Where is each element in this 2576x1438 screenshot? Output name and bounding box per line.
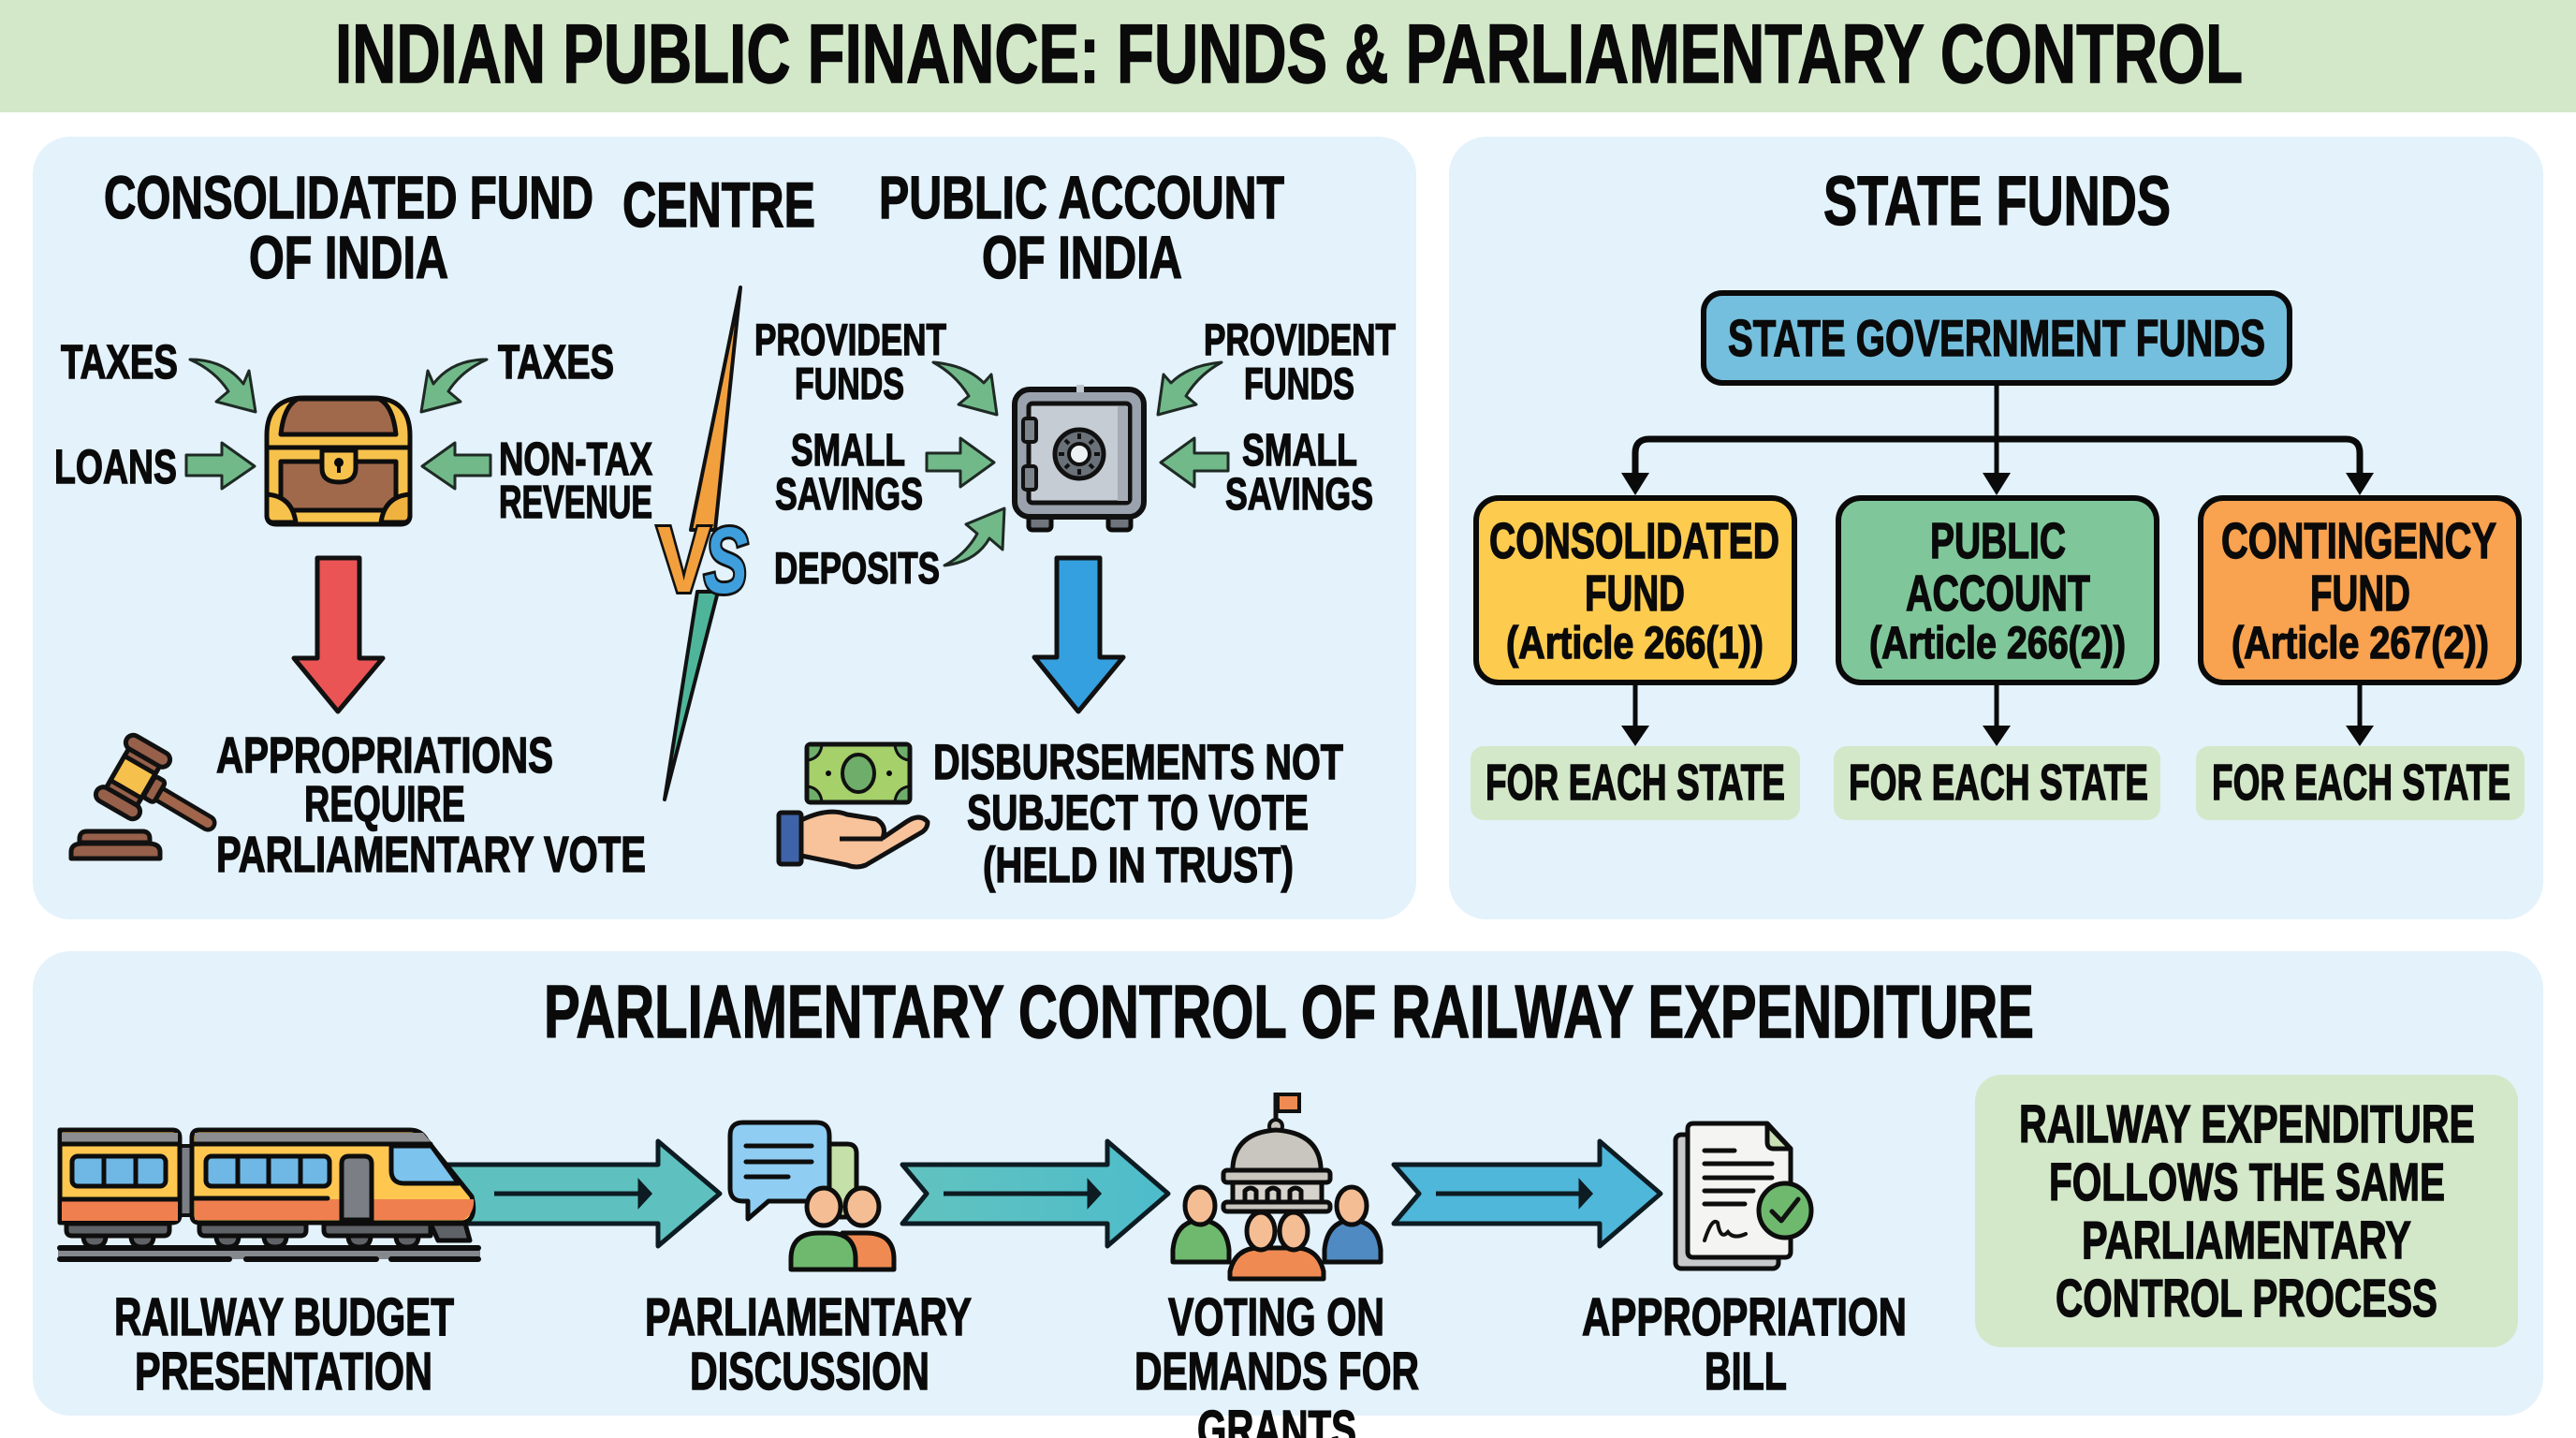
icon: gavel <box>71 732 208 858</box>
label: provident funds right: FUNDS <box>1244 359 1354 408</box>
arrow: discussion to voting <box>902 1141 1168 1246</box>
box: consolidated fund: FUND <box>1585 565 1685 622</box>
label: voting on demands for grants: VOTING ON <box>1168 1287 1384 1347</box>
heading: consolidated fund of india <box>104 164 593 291</box>
box: public account <box>1838 498 2157 682</box>
label: provident funds left: PROVIDENT <box>754 315 946 364</box>
heading: public account of india <box>879 164 1284 291</box>
arrow: small savings left into safe <box>927 438 994 487</box>
label: small savings right: SAVINGS <box>1225 470 1373 520</box>
tag: for each state 2: FOR EACH STATE <box>1849 755 2148 811</box>
heading: state funds: STATE FUNDS <box>1823 162 2171 240</box>
heading: public account of india: OF INDIA <box>982 224 1182 291</box>
label: appropriation bill <box>1582 1287 1907 1401</box>
label: appropriation bill: BILL <box>1705 1342 1787 1401</box>
heading: public account of india: PUBLIC ACCOUNT <box>879 164 1284 231</box>
panel: railway expenditure <box>33 951 2543 1438</box>
label: appropriation bill: APPROPRIATION <box>1582 1287 1907 1347</box>
label: railway budget presentation <box>114 1287 454 1401</box>
label: taxes left: TAXES <box>61 335 178 389</box>
label: small savings left <box>775 426 923 520</box>
label: provident funds right: PROVIDENT <box>1204 315 1396 364</box>
tag: for each state 1 <box>1471 746 1800 820</box>
label: railway budget presentation: RAILWAY BUDGET <box>114 1287 454 1347</box>
arrow: provident left into safe <box>933 362 997 415</box>
label: deposits: DEPOSITS <box>774 543 940 593</box>
box: public account: PUBLIC <box>1930 513 2066 569</box>
arrow: non-tax revenue into chest <box>422 443 490 489</box>
VS divider with lightning <box>657 287 748 800</box>
label: provident funds right <box>1204 315 1396 408</box>
heading: centre: CENTRE <box>622 169 815 241</box>
tag: for each state 2 <box>1834 746 2160 820</box>
arrow: taxes left into chest <box>190 360 256 412</box>
label: non-tax revenue: NON-TAX <box>499 434 652 485</box>
arrow: deposits into safe <box>944 508 1004 565</box>
text: disbursements not subject to vote: (HELD IN TRUST) <box>983 838 1294 893</box>
arrow: loans into chest <box>186 443 255 489</box>
text: disbursements not subject to vote: DISBURSEMENTS NOT <box>933 735 1343 790</box>
icon: parliament with voters <box>1173 1093 1381 1279</box>
label: small savings right <box>1225 426 1373 520</box>
label: provident funds left <box>754 315 946 408</box>
label: small savings left: SMALL <box>791 426 905 476</box>
arrows: down to for each state <box>1621 684 2374 746</box>
VS divider with lightning: S <box>704 508 748 613</box>
heading: parliamentary control of railway expenditure: PARLIAMENTARY CONTROL OF RAILWAY EXPENDITURE <box>544 970 2034 1053</box>
box: consolidated fund: (Article 266(1)) <box>1506 619 1764 668</box>
icon: parliamentary discussion <box>730 1123 894 1269</box>
label: railway budget presentation: PRESENTATION <box>135 1342 432 1401</box>
label: loans: LOANS <box>54 440 177 493</box>
box: contingency fund <box>2201 498 2519 682</box>
icon: safe <box>1015 385 1144 530</box>
arrow: voting to bill <box>1394 1141 1661 1246</box>
tag: for each state 1: FOR EACH STATE <box>1486 755 1785 811</box>
label: taxes right: TAXES <box>498 335 614 389</box>
box: consolidated fund: CONSOLIDATED <box>1489 513 1779 569</box>
label: small savings right: SMALL <box>1242 426 1357 476</box>
callout: same parliamentary control process: PARLIAMENTARY <box>2082 1211 2411 1270</box>
label: voting on demands for grants: DEMANDS FOR <box>1134 1342 1419 1401</box>
label: provident funds left: FUNDS <box>795 359 904 408</box>
text: appropriations require parliamentary vote: APPROPRIATIONS <box>216 727 553 784</box>
callout: same parliamentary control process <box>1975 1075 2518 1347</box>
heading: consolidated fund of india: OF INDIA <box>249 224 448 291</box>
arrow: budget to discussion <box>440 1141 720 1246</box>
arrow: blue down <box>1034 558 1123 712</box>
arrow: small savings right into safe <box>1161 438 1228 487</box>
label: non-tax revenue <box>499 434 652 528</box>
arrow: red down <box>294 558 383 712</box>
box: public account: (Article 266(2)) <box>1869 619 2126 668</box>
icon: appropriation bill document <box>1676 1123 1811 1269</box>
icon: train <box>58 1130 480 1259</box>
text: disbursements not subject to vote: SUBJECT TO VOTE <box>967 785 1309 841</box>
connector tree <box>1621 385 2374 495</box>
icon: cash in hand <box>779 744 928 867</box>
label: parliamentary discussion: PARLIAMENTARY <box>645 1287 972 1347</box>
label: voting on demands for grants <box>1134 1287 1419 1438</box>
text: appropriations require parliamentary vote <box>216 727 646 883</box>
text: appropriations require parliamentary vote: PARLIAMENTARY VOTE <box>216 827 646 883</box>
panel: centre funds <box>33 137 1416 919</box>
icon: treasure chest <box>267 398 410 524</box>
box: contingency fund: (Article 267(2)) <box>2232 619 2489 668</box>
label: non-tax revenue: REVENUE <box>499 477 652 528</box>
box: contingency fund: FUND <box>2310 565 2410 622</box>
box: state government funds <box>1704 293 2290 383</box>
label: parliamentary discussion <box>645 1287 972 1401</box>
tag: for each state 3 <box>2196 746 2525 820</box>
VS divider with lightning: V <box>657 507 710 612</box>
heading: consolidated fund of india: CONSOLIDATED FUND <box>104 164 593 231</box>
box: public account: ACCOUNT <box>1906 565 2090 622</box>
arrow: taxes right into chest <box>421 360 487 412</box>
text: disbursements not subject to vote <box>933 735 1343 893</box>
label: small savings left: SAVINGS <box>775 470 923 520</box>
box: consolidated fund <box>1476 498 1794 682</box>
box: state government funds: STATE GOVERNMENT FUNDS <box>1728 309 2265 367</box>
panel: state funds <box>1449 137 2543 919</box>
text: appropriations require parliamentary vote: REQUIRE <box>304 776 465 832</box>
label: parliamentary discussion: DISCUSSION <box>690 1342 929 1401</box>
arrow: provident right into safe <box>1158 362 1222 415</box>
